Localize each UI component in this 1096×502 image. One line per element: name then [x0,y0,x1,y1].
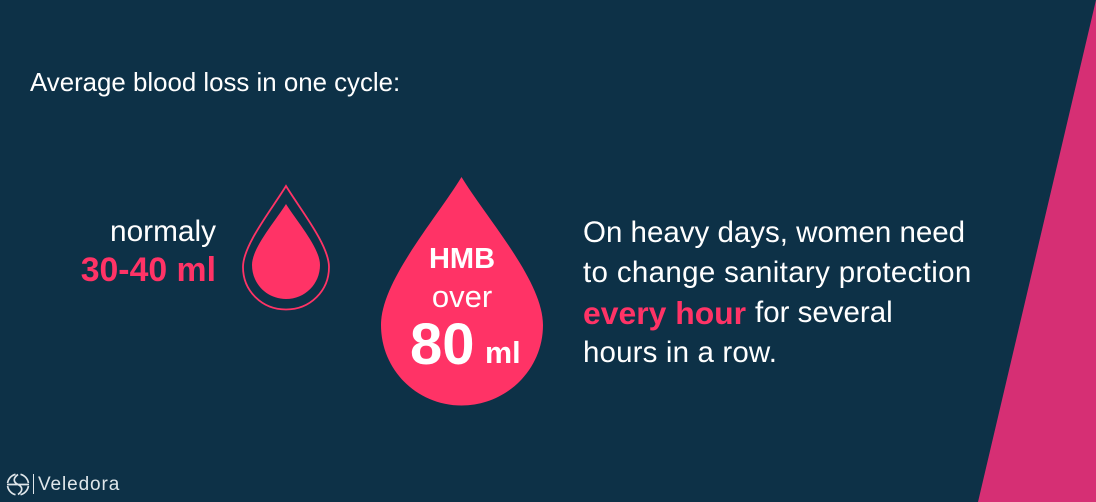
large drop text: HMB over 80 ml [410,243,521,377]
description text: heavy days [583,216,972,369]
normal amount label: 30-40 ml [81,251,216,289]
large drop text: HMB over 80 ml: HMB [429,243,495,275]
normal amount label [81,215,216,289]
large drop text: HMB over 80 ml: 80 [410,312,475,377]
description text: heavy days: hours in a row. [583,336,777,369]
logo: Veledora: Veledora [38,474,120,495]
description text: heavy days: every hour [583,294,746,330]
description text: heavy days: to change sanitary protection [583,256,972,288]
normal amount label: normaly [110,215,216,248]
description text: heavy days: for several [755,296,893,329]
heading: average blood loss: Average blood loss in one cycle: [30,69,400,97]
logo: Veledora [6,474,120,496]
description text: heavy days: On heavy days, women need [583,216,965,248]
large drop text: HMB over 80 ml: ml [485,336,521,370]
large drop text: HMB over 80 ml: over [432,279,492,314]
